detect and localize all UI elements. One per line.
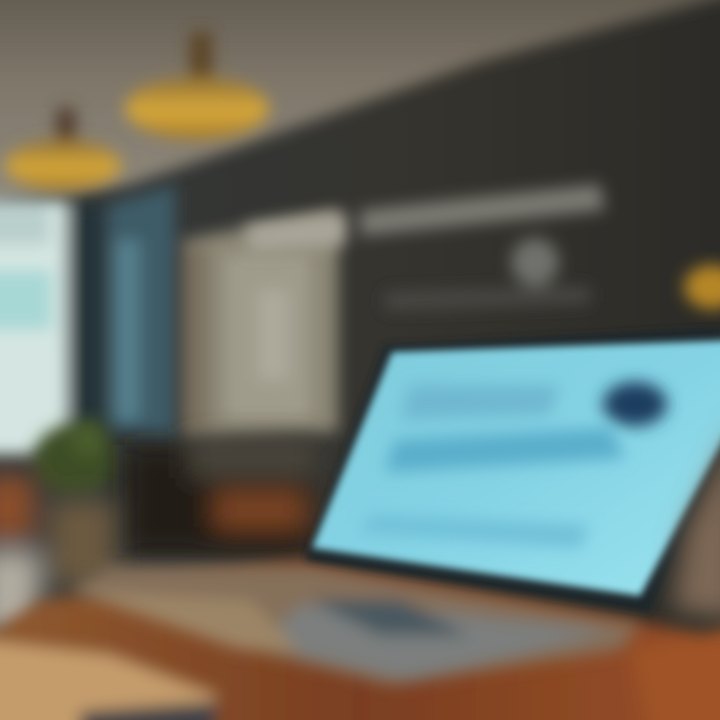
window and teal column [0,185,175,455]
icon: pendant lamp large [125,32,269,139]
wall sign text blur [245,184,605,310]
laptop base [70,565,640,685]
laptop screen [312,340,720,596]
laptop right shadow [672,420,720,620]
table [0,560,720,720]
ceiling [0,0,720,205]
screen content [360,382,667,548]
poster on wall [182,210,338,440]
dark furniture [125,438,315,555]
icon: pendant lamp right edge [684,265,720,309]
laptop bezel [305,328,720,612]
panel: laptop [70,328,720,685]
icon: pendant lamp small [5,108,121,190]
plant [33,418,117,496]
left foreground blur [0,475,115,635]
